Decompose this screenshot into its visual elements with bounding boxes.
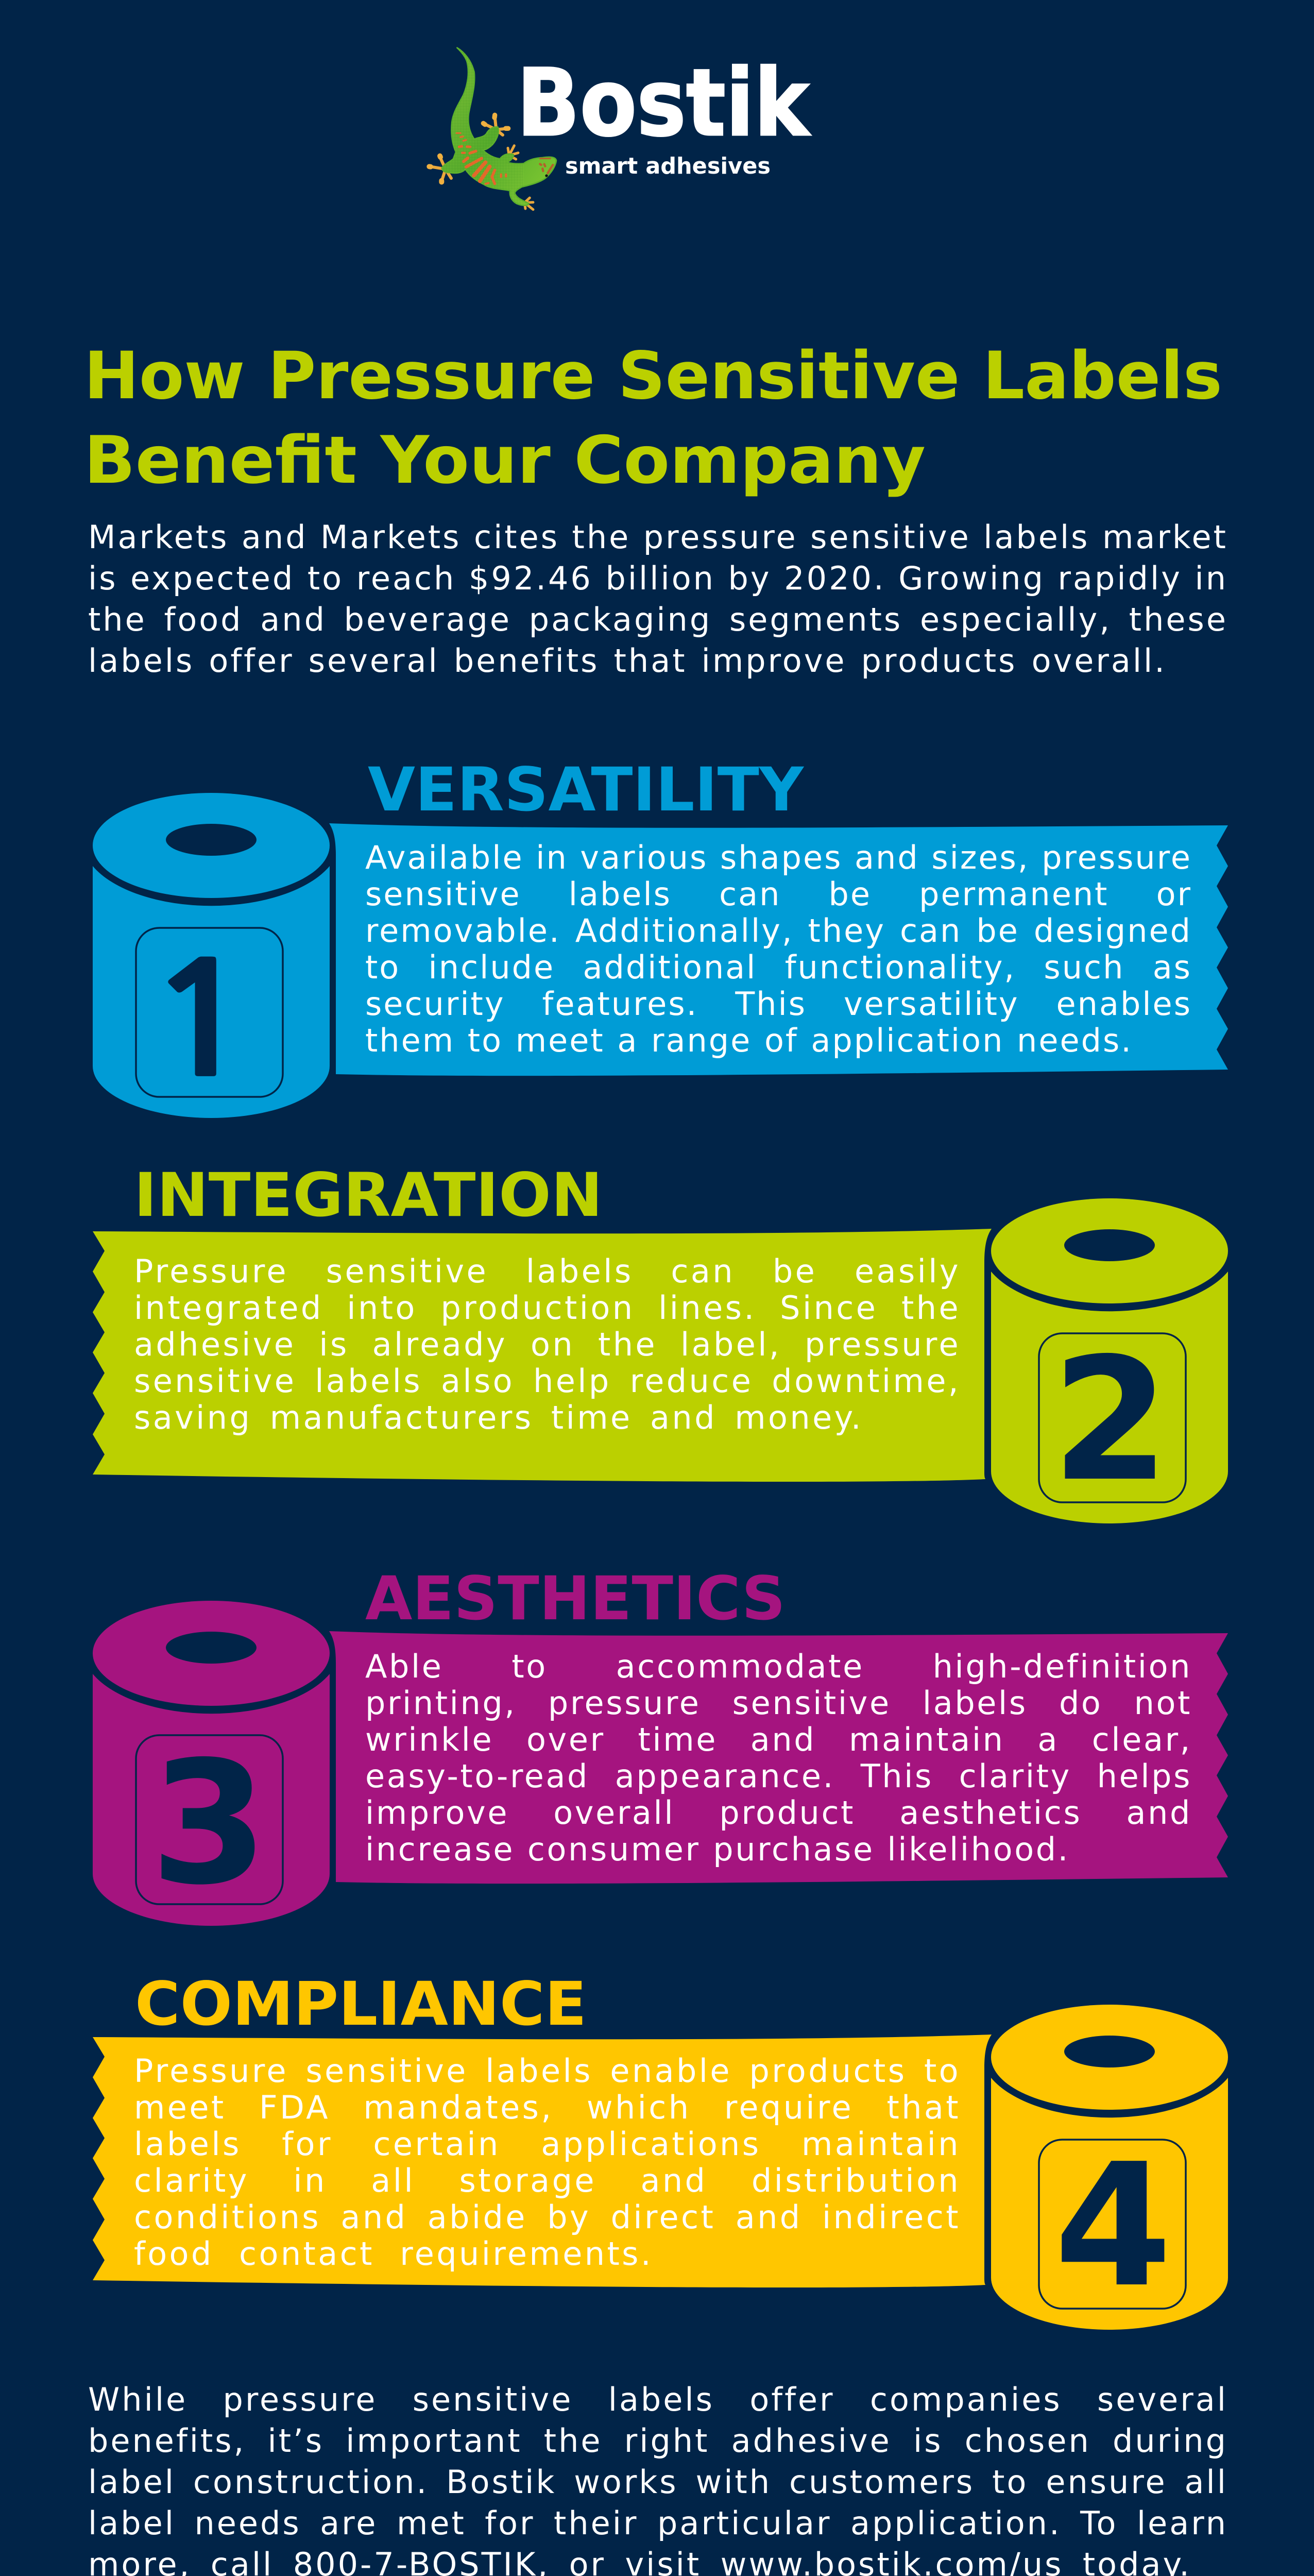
title: Benefit Your Company <box>84 422 926 498</box>
closing paragraph: While pressure sensitive labels offer companies several <box>88 2381 1228 2418</box>
intro paragraph: labels offer several benefits that improve products overall. <box>88 642 1167 680</box>
text: compliance: food contact requirements. <box>134 2235 653 2273</box>
title: How Pressure Sensitive Labels <box>84 337 1222 414</box>
title <box>84 337 1222 498</box>
icon: roll 2: 2 <box>1052 1321 1169 1519</box>
icon: gecko <box>429 48 556 210</box>
text: integration: integrated into production lines. Since the <box>134 1289 961 1327</box>
text: integration: saving manufacturers time and money. <box>134 1399 863 1436</box>
intro paragraph <box>88 518 1228 680</box>
panel 4: compliance <box>93 1969 1228 2330</box>
text: integration: sensitive labels also help reduce downtime, <box>134 1362 961 1400</box>
intro paragraph: is expected to reach $92.46 billion by 2020. Growing rapidly in <box>88 560 1228 597</box>
text: versatility: them to meet a range of application needs. <box>365 1022 1133 1059</box>
panel 3: aesthetics <box>93 1563 1228 1926</box>
panel 1: versatility <box>93 754 1228 1118</box>
closing paragraph <box>88 2381 1228 2576</box>
text: compliance: meet FDA mandates, which require that <box>134 2089 961 2126</box>
ribbon: compliance <box>93 2035 992 2287</box>
heading: aesthetics: AESTHETICS <box>365 1563 786 1634</box>
text: aesthetics: easy-to-read appearance. This clarity helps <box>365 1757 1192 1795</box>
text: aesthetics: improve overall product aesthetics and <box>365 1794 1192 1832</box>
wordmark: Bostik: Bostik <box>517 49 811 157</box>
text: versatility: to include additional functionality, such as <box>365 948 1192 986</box>
ribbon: integration <box>93 1229 992 1482</box>
text: compliance: conditions and abide by direct and indirect <box>134 2198 961 2236</box>
text: aesthetics <box>365 1648 1192 1868</box>
text: versatility: sensitive labels can be permanent or <box>365 875 1192 913</box>
heading: compliance: COMPLIANCE <box>135 1969 587 2039</box>
closing paragraph: label construction. Bostik works with customers to ensure all <box>88 2463 1228 2501</box>
closing paragraph: benefits, it’s important the right adhesive is chosen during <box>88 2422 1228 2460</box>
icon: roll 2 <box>991 1198 1228 1523</box>
text: aesthetics: wrinkle over time and maintain a clear, <box>365 1721 1192 1758</box>
intro paragraph: Markets and Markets cites the pressure sensitive labels market <box>88 518 1228 556</box>
panel 2: integration <box>93 1160 1228 1523</box>
icon: roll 1 <box>93 793 330 1118</box>
text: aesthetics: increase consumer purchase likelihood. <box>365 1831 1070 1868</box>
icon: roll 4 <box>991 2005 1228 2330</box>
icon: roll 4: 4 <box>1054 2127 1172 2325</box>
text: versatility: removable. Additionally, they can be designed <box>365 912 1192 950</box>
text: compliance: clarity in all storage and distribution <box>134 2162 961 2199</box>
icon: roll 3 <box>93 1601 330 1926</box>
tagline: smart adhesives: smart adhesives <box>565 153 771 179</box>
text: compliance <box>134 2052 961 2273</box>
text: versatility: Available in various shapes and sizes, pressure <box>365 839 1192 876</box>
heading: versatility: VERSATILITY <box>368 754 804 825</box>
closing paragraph: label needs are met for their particular application. To learn <box>88 2504 1228 2542</box>
icon: roll 1: 1 <box>145 944 258 1098</box>
text: aesthetics: printing, pressure sensitive labels do not <box>365 1684 1192 1722</box>
heading: integration: INTEGRATION <box>134 1160 603 1230</box>
text: versatility <box>365 839 1192 1059</box>
icon: roll 3: 3 <box>150 1725 268 1922</box>
text: integration <box>134 1252 961 1436</box>
text: compliance: Pressure sensitive labels enable products to <box>134 2052 961 2090</box>
text: aesthetics: Able to accommodate high-definition <box>365 1648 1192 1685</box>
ribbon: versatility <box>329 823 1228 1076</box>
text: versatility: security features. This versatility enables <box>365 985 1192 1023</box>
ribbon: aesthetics <box>329 1631 1228 1884</box>
logo: Bostik smart adhesives <box>429 48 811 210</box>
text: compliance: labels for certain applications maintain <box>134 2125 961 2163</box>
text: integration: Pressure sensitive labels can be easily <box>134 1252 961 1290</box>
text: integration: adhesive is already on the label, pressure <box>134 1326 961 1363</box>
intro paragraph: the food and beverage packaging segments especially, these <box>88 601 1228 638</box>
